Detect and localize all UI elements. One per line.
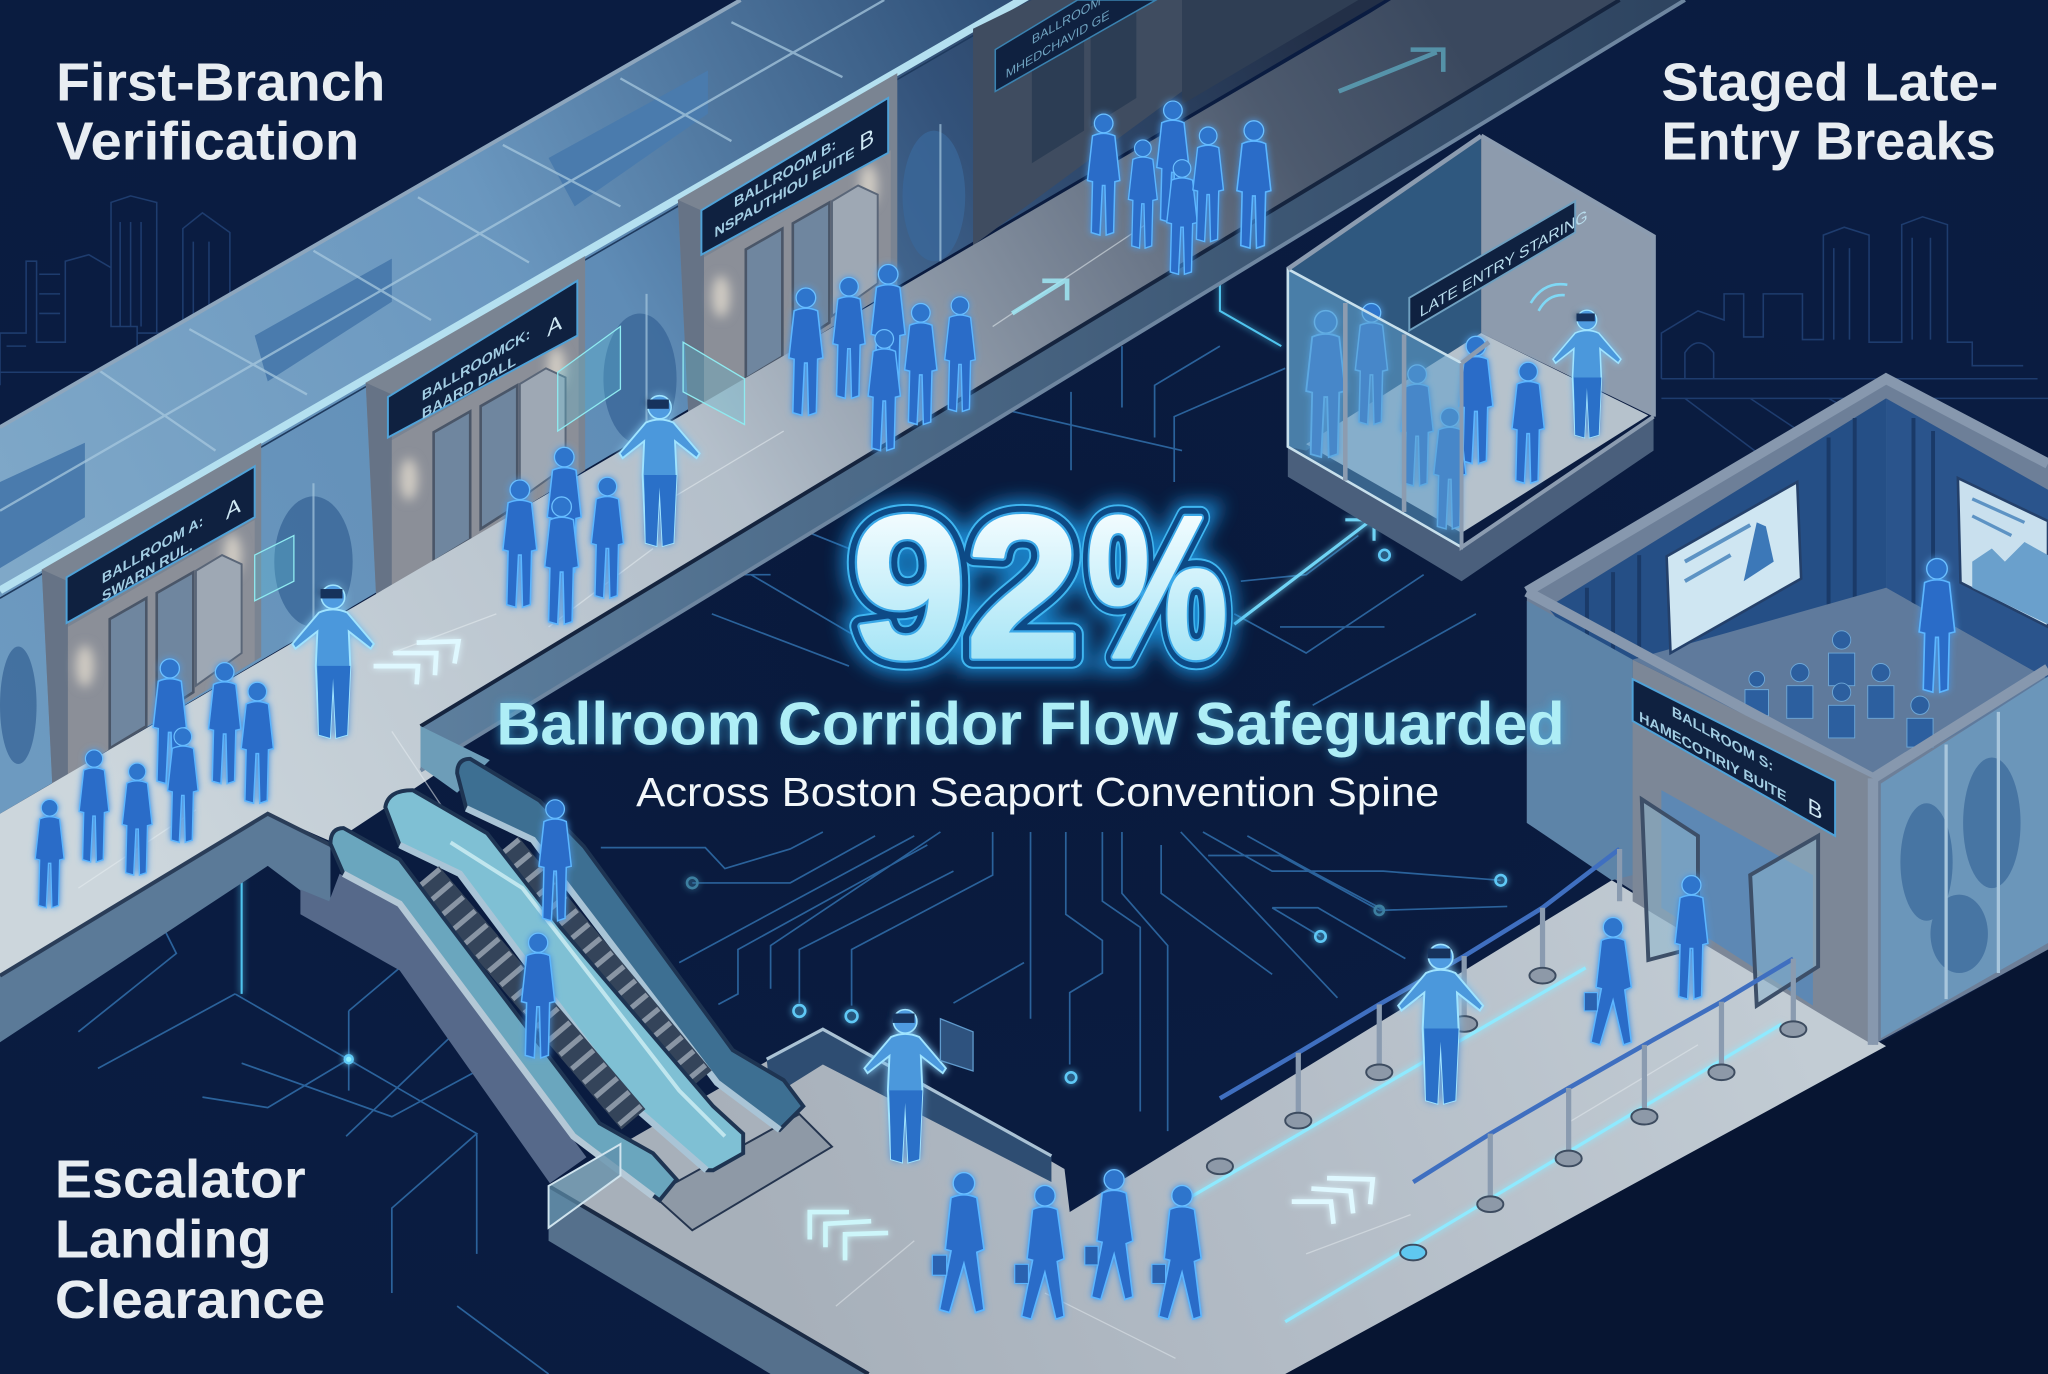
- metric glow halo: 92: [852, 474, 1080, 700]
- door unit: ballroom B: [678, 73, 897, 414]
- info panel at landing: [940, 1019, 973, 1071]
- sign: ballroom board hall: A: [547, 309, 562, 343]
- door unit: ballroom A board hall: [366, 256, 585, 597]
- sign: ballroom A: BALLROOM A:: [102, 513, 203, 588]
- sign: ballroom A: SWARN RUL.: [102, 537, 193, 606]
- presenter: [1919, 559, 1955, 692]
- queue at door A: [35, 659, 273, 908]
- stanchions and belts: back row: [1207, 849, 1620, 1174]
- skyline left: [0, 196, 230, 385]
- label: escalator landing clearance: Landing: [55, 1211, 272, 1270]
- floor chevrons: [374, 641, 458, 684]
- presentation screen right: [1958, 478, 2048, 627]
- dark windows at far end: [1182, 0, 1358, 104]
- right balustrade: [457, 759, 803, 1130]
- floor chevrons lower right: [1292, 1178, 1373, 1224]
- door unit: far ballroom: [973, 0, 1182, 246]
- right glass audience wall: [1881, 677, 2048, 1038]
- metric dark band: 92: [852, 474, 1080, 700]
- central metric: [852, 474, 1228, 700]
- people in room: [1306, 304, 1621, 529]
- metric inner outline: [852, 474, 1228, 700]
- sign: ballroom A: A: [226, 492, 241, 525]
- skyline right: [1661, 217, 2048, 457]
- sign: ballroom board hall: BAARD DALL: [422, 353, 516, 423]
- floor guide lines: [1187, 968, 1782, 1322]
- headline: Ballroom Corridor Flow Safeguarded: [496, 690, 1565, 757]
- metric glow halo: %: [1087, 474, 1228, 700]
- hologram panels: [255, 327, 744, 601]
- left balustrade: [330, 828, 677, 1200]
- room top edges: [1527, 379, 2048, 778]
- carpet floor: [1633, 588, 2048, 778]
- group at door A2: [503, 447, 623, 624]
- metric dark band: [852, 474, 1228, 700]
- flow arrow: [1012, 281, 1067, 313]
- staff with tablet: [1398, 944, 1483, 1104]
- sign: ballroom suite: HAMECOTIRIY BUITE: [1639, 709, 1787, 806]
- lower landing floor: [549, 880, 1886, 1374]
- left stairs: [427, 876, 633, 1119]
- walkers on lower corridor: [932, 1170, 1201, 1319]
- headline glow: Ballroom Corridor Flow Safeguarded: [496, 690, 1565, 757]
- group at door B: [789, 264, 975, 451]
- corridor wall: [0, 0, 1384, 814]
- label: first-branch verification: First-Branch: [56, 54, 385, 113]
- arrow from metric to late entry room: [1234, 520, 1374, 624]
- sign: ballroom B: [701, 98, 888, 255]
- entrance wall and open doors: [1633, 660, 1873, 1045]
- upper corridor: [0, 0, 1685, 1042]
- sign: far ballroom: MHEDCHAVID GE: [1006, 7, 1110, 81]
- metric outer outline: [852, 474, 1228, 700]
- metric outer outline: %: [1087, 474, 1228, 700]
- label: staged late-entry breaks: [1661, 54, 1998, 171]
- group at far door: [1088, 101, 1271, 274]
- label: staged late-entry breaks: Staged Late-: [1661, 54, 1998, 113]
- right stairs: [507, 846, 700, 1080]
- door unit: ballroom A first: [42, 443, 261, 784]
- circuit nodes: [242, 263, 1506, 1083]
- metric inner outline: 92: [852, 474, 1080, 700]
- metric value: [852, 474, 1228, 700]
- wall glazing silhouettes: [0, 131, 965, 764]
- staff at door A: [292, 585, 374, 738]
- glass roof: [0, 0, 1028, 593]
- corridor marble floor: [0, 0, 1620, 976]
- sign: ballroom suite: BALLROOM S:: [1672, 704, 1773, 775]
- sign: far ballroom: [995, 0, 1156, 91]
- stanchions and belts: front row: [1400, 959, 1806, 1260]
- left glass face: [1527, 601, 1633, 880]
- rider on escalator lower: [521, 933, 555, 1058]
- sign: late entry staging: LATE ENTRY STARING: [1420, 206, 1588, 321]
- sign: ballroom A: [67, 466, 255, 623]
- metric inner outline: %: [1087, 474, 1228, 700]
- sign: ballroom B: B: [859, 123, 874, 157]
- seated audience: [1745, 631, 1933, 747]
- label: escalator landing clearance: Escalator: [55, 1151, 306, 1210]
- label: escalator landing clearance: Clearance: [55, 1271, 325, 1330]
- circuit traces: [78, 346, 1507, 1374]
- wifi icon: [1531, 284, 1567, 311]
- curtain back wall: [1548, 398, 1886, 712]
- sign: ballroom suite: [1633, 679, 1835, 836]
- label: first-branch verification: [56, 54, 385, 171]
- metric dark band: %: [1087, 474, 1228, 700]
- metric glow halo: [852, 474, 1228, 700]
- rider on escalator upper: [539, 800, 571, 921]
- late entry staging room: [1288, 136, 1654, 581]
- subheading: Across Boston Seaport Convention Spine: [636, 769, 1439, 815]
- ballroom room with curtains and screens: [1527, 379, 2048, 1045]
- glass balustrade: [0, 0, 1685, 1042]
- metric outer outline: 92: [852, 474, 1080, 700]
- flow arrow far: [1339, 50, 1443, 91]
- floor chevrons lower left: [810, 1212, 888, 1260]
- presentation screen left: [1667, 482, 1801, 653]
- metric value: 92: [852, 474, 1080, 700]
- metric value: %: [1087, 474, 1228, 700]
- sign: ballroom B: BALLROOM B:: [734, 136, 836, 211]
- staff at door A2: [620, 396, 700, 546]
- sign: ballroom board hall: BALLROOMCK:: [422, 326, 530, 405]
- middle balustrade: [385, 790, 743, 1170]
- staff at escalator landing: [864, 1010, 946, 1162]
- escalator truss: [300, 874, 586, 1183]
- sign: ballroom B: NSPAUTHIOU EUITE: [714, 144, 855, 241]
- sign: ballroom suite: B: [1808, 793, 1822, 826]
- escalators: [300, 759, 803, 1228]
- sign: ballroom board hall: [388, 281, 577, 438]
- front glass: [1288, 269, 1462, 547]
- label: staged late-entry breaks: Entry Breaks: [1661, 112, 1996, 171]
- glass fence at escalator foot: [549, 1144, 620, 1228]
- label: first-branch verification: Verification: [56, 112, 359, 171]
- guests entering ballroom: [1584, 876, 1708, 1045]
- label: escalator landing clearance: [55, 1151, 325, 1330]
